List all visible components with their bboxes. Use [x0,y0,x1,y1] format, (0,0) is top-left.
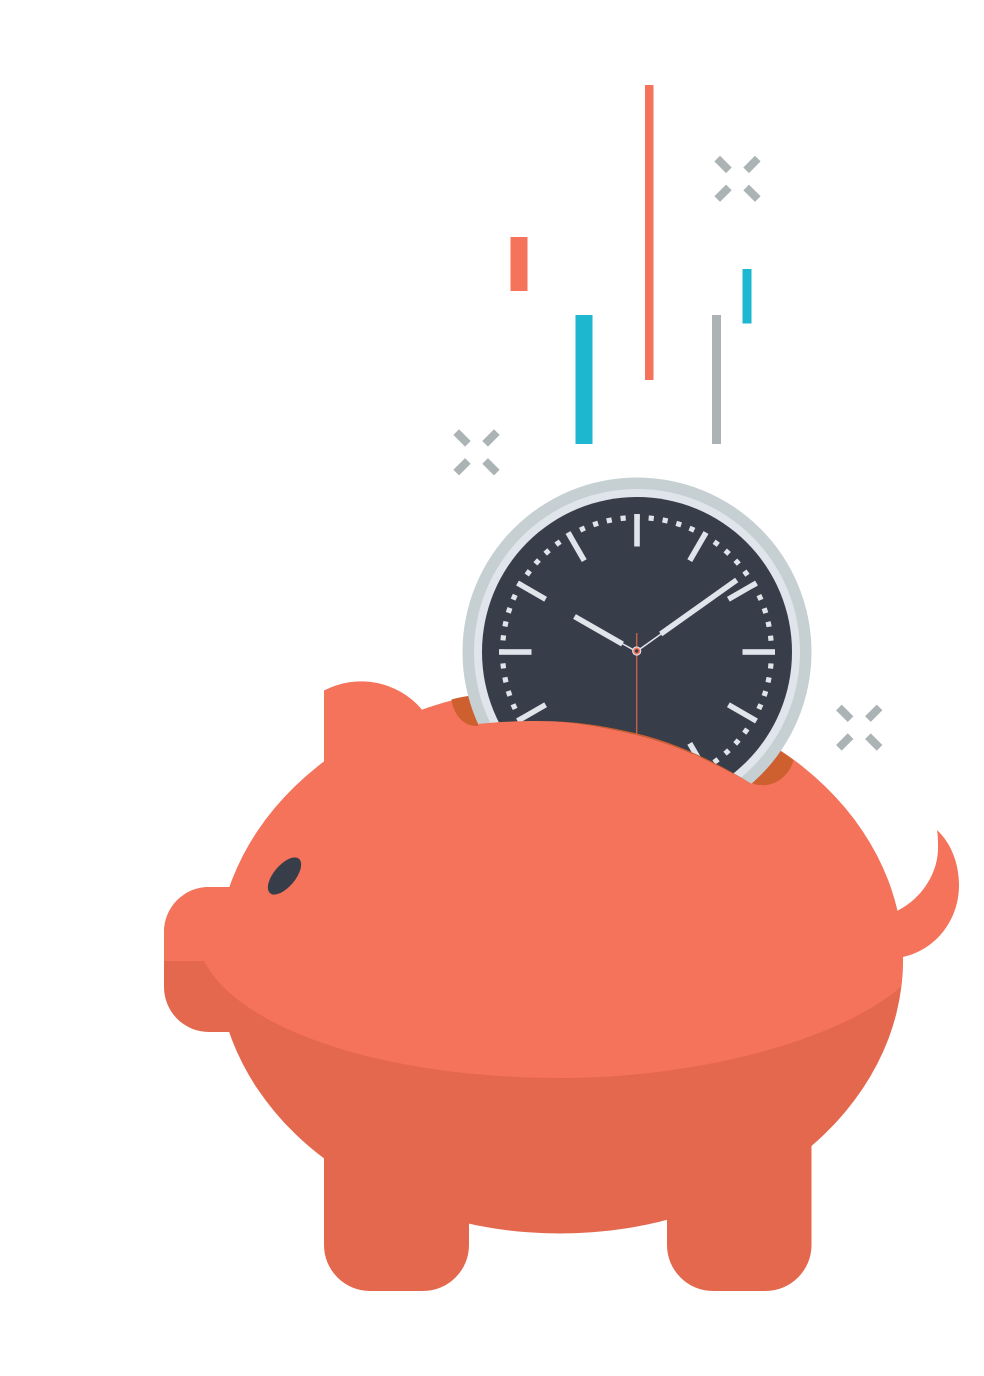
hour ticks [499,514,775,773]
minute hand [636,580,737,652]
sparkle: top right [714,156,761,202]
clock dial [482,497,792,807]
falling bars [510,85,752,444]
pig body light upper part [164,700,903,1078]
minute dots [502,518,772,786]
clock coin [462,478,812,826]
hour hand [574,616,636,652]
sparkle: left of clock [453,429,500,475]
coin slot shadow: left [452,694,490,726]
pig front body covering clock [478,721,752,870]
second hand [636,633,638,737]
clock rim [462,478,812,826]
sparkle: right of clock [836,705,882,751]
pig eye [262,852,307,900]
coin slot shadow: right [752,735,794,785]
clock centre pin [632,646,641,656]
pig body shadow base with snout and feet [164,686,903,1291]
slot edge shadow [537,721,752,784]
pig ear [324,681,422,770]
pig tail [880,830,959,957]
clock inner ring [474,489,800,815]
